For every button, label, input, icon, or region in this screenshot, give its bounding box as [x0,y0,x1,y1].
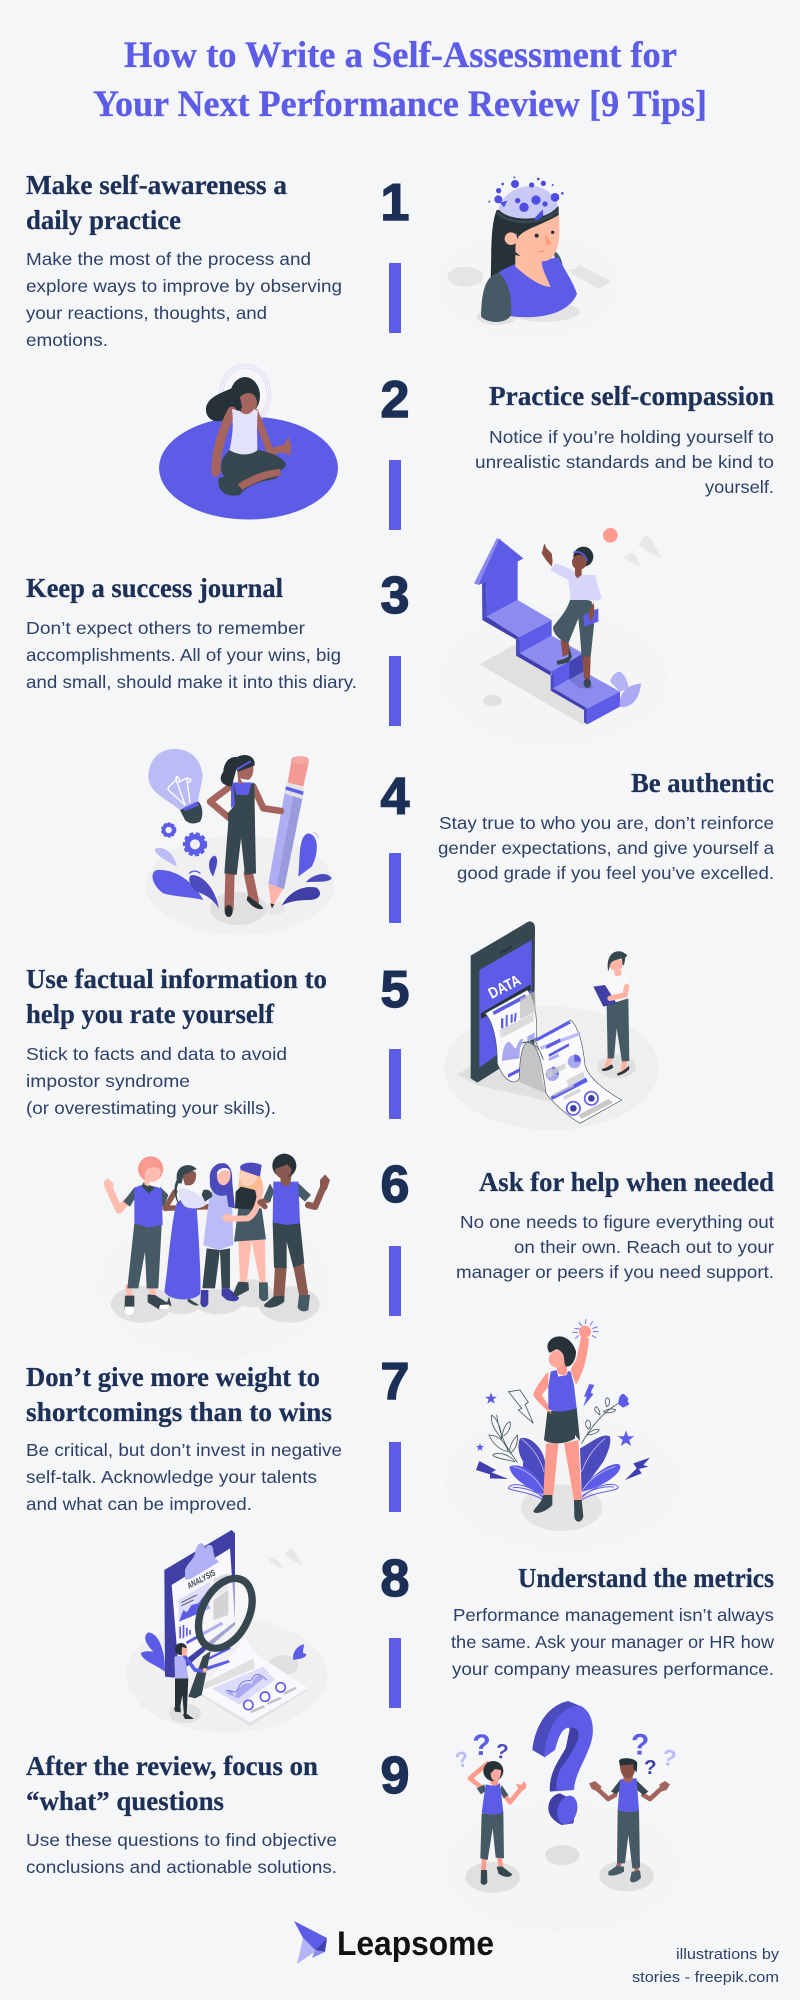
tip 5 heading [26,964,327,1029]
report sheet [197,1635,308,1726]
tip 6 text: on their own. Reach out to your [514,1237,774,1257]
clipboard [164,1530,235,1678]
tip 7 text: and what can be improved. [26,1494,252,1514]
floating question marks: ? [660,1744,678,1772]
tip 5 text: (or overestimating your skills). [26,1098,276,1118]
woman [561,640,571,657]
floating question marks: ? [631,1728,649,1761]
title: Your Next Performance Review [9 Tips] [93,84,707,125]
number 8: 8 [381,1550,409,1608]
tip 2 text: yourself. [705,477,774,497]
tip 2 text [475,427,774,497]
illustration: person with magnifying glass and analysis report [126,1530,327,1732]
number 6: 6 [381,1156,409,1214]
tip 3 text [26,618,357,692]
tip 1 text: Make the most of the process and [26,249,311,269]
title: How to Write a Self-Assessment for [124,35,677,76]
tip 1 text: explore ways to improve by observing [26,276,342,296]
tip 9 text [26,1830,337,1877]
illustration: person with magnifying glass and analysis report: ANALYSIS [185,1567,217,1591]
tip 9 heading: After the review, focus on [26,1751,318,1781]
pencil [268,884,283,908]
tip 7 text: Be critical, but don’t invest in negative [26,1440,342,1460]
man [175,1678,188,1715]
person 1 [103,1156,170,1315]
illustration: data phone printing report [444,921,659,1130]
tip 9 heading [26,1751,318,1816]
tip 6 illustration: group of five friends [102,1154,330,1356]
divider bar 4 [389,853,401,923]
floating question marks: ? [472,1729,491,1762]
illustration: two confused people and giant question mark [449,1701,678,1929]
tip 1 text: your reactions, thoughts, and [26,303,267,323]
floating question marks: ? [453,1746,471,1773]
tip 2 text: unrealistic standards and be kind to [475,452,774,472]
tip 1 heading [26,170,288,235]
man [589,1758,670,1882]
tip 3 text: and small, should make it into this diary. [26,672,357,692]
tip 4 heading: Be authentic [631,768,774,798]
title [93,35,707,125]
person 2 [164,1165,210,1307]
leaves [141,1632,165,1672]
person 3 [200,1163,239,1307]
tip 3 heading: Keep a success journal [26,573,283,603]
tip 8 heading: Understand the metrics [518,1563,774,1593]
tip 6 text: No one needs to figure everything out [460,1212,774,1232]
illustration credit [632,1946,780,1986]
floating question marks: ? [644,1756,657,1779]
illustration: woman meditating [159,364,338,520]
illustration: woman with flowers in her head [441,176,617,335]
divider bar 2 [389,460,401,530]
tip 4 text: Stay true to who you are, don’t reinforce [439,813,774,833]
tip 5 text: Stick to facts and data to avoid [26,1044,287,1064]
tip 6 heading: Ask for help when needed [479,1167,774,1197]
floating question marks [453,1728,678,1779]
tip 6 text [456,1212,774,1282]
illustration: woman with light bulb and pencil [146,749,334,935]
tip 1 heading: Make self-awareness a [26,170,288,200]
tip 7 text: self-talk. Acknowledge your talents [26,1467,317,1487]
number 1: 1 [381,174,409,232]
illustration credit: illustrations by [676,1946,780,1963]
tip 4 text [438,813,774,883]
woman [470,1761,526,1885]
floating question marks: ? [494,1740,510,1764]
tip 1 heading: daily practice [26,205,181,235]
tip 6 text: manager or peers if you need support. [456,1262,774,1282]
illustration: woman climbing stairs arrow [442,528,665,742]
logo bird icon [294,1921,327,1964]
divider bar 8 [389,1638,401,1708]
tip 7 heading: Don’t give more weight to [26,1362,320,1392]
tip 7 heading [26,1362,332,1427]
tip 1 text: emotions. [26,330,108,350]
number 2: 2 [381,371,409,429]
outlined plants [489,1415,518,1462]
woman [229,873,254,908]
tip 4 text: gender expectations, and give yourself a [438,838,774,858]
tip 5 text [26,1044,287,1118]
logo wordmark: Leapsome [337,1925,494,1963]
illustration credit: stories - freepik.com [632,1969,779,1986]
tip 8 text: the same. Ask your manager or HR how [451,1632,774,1652]
lightning bolts [508,1390,533,1423]
tip 1 text [26,249,342,350]
divider bar 3 [389,656,401,726]
divider bar 7 [389,1442,401,1512]
tip 9 text: Use these questions to find objective [26,1830,337,1850]
tip 7 heading: shortcomings than to wins [26,1397,332,1427]
number 9: 9 [381,1747,409,1805]
tip 8 text: your company measures performance. [452,1659,774,1679]
tip 2 heading: Practice self-compassion [489,381,774,411]
person 4 [221,1163,268,1301]
divider bar 6 [389,1246,401,1316]
divider bar 1 [389,263,401,333]
tip 2 text: Notice if you’re holding yourself to [489,427,774,447]
illustration: data phone printing report: DATA [486,972,524,1003]
magnifying glass [188,1651,211,1698]
tip 7 text [26,1440,342,1514]
illustration: woman raising fist with plants [447,1320,677,1548]
tip 8 text: Performance management isn’t always [453,1605,774,1625]
tip 5 text: impostor syndrome [26,1071,190,1091]
tip 3 text: accomplishments. All of your wins, big [26,645,341,665]
tip 5 heading: help you rate yourself [26,999,275,1029]
divider bar 5 [389,1049,401,1119]
number 3: 3 [381,567,409,625]
woman with clipboard [607,1058,625,1072]
person 5 [260,1154,330,1311]
tip 9 text: conclusions and actionable solutions. [26,1857,337,1877]
purple mat [159,416,338,520]
tip 8 text [451,1605,774,1679]
tip 5 heading: Use factual information to [26,964,327,994]
tip 4 text: good grade if you feel you’ve excelled. [457,863,774,883]
logo: Leapsome [294,1921,494,1964]
number 5: 5 [381,961,409,1019]
tip 9 heading: “what” questions [26,1786,224,1816]
woman [543,1440,582,1500]
stars [476,1392,634,1451]
number 7: 7 [381,1353,409,1411]
tip 3 text: Don’t expect others to remember [26,618,305,638]
number 4: 4 [381,768,410,826]
giant question mark [532,1701,593,1827]
